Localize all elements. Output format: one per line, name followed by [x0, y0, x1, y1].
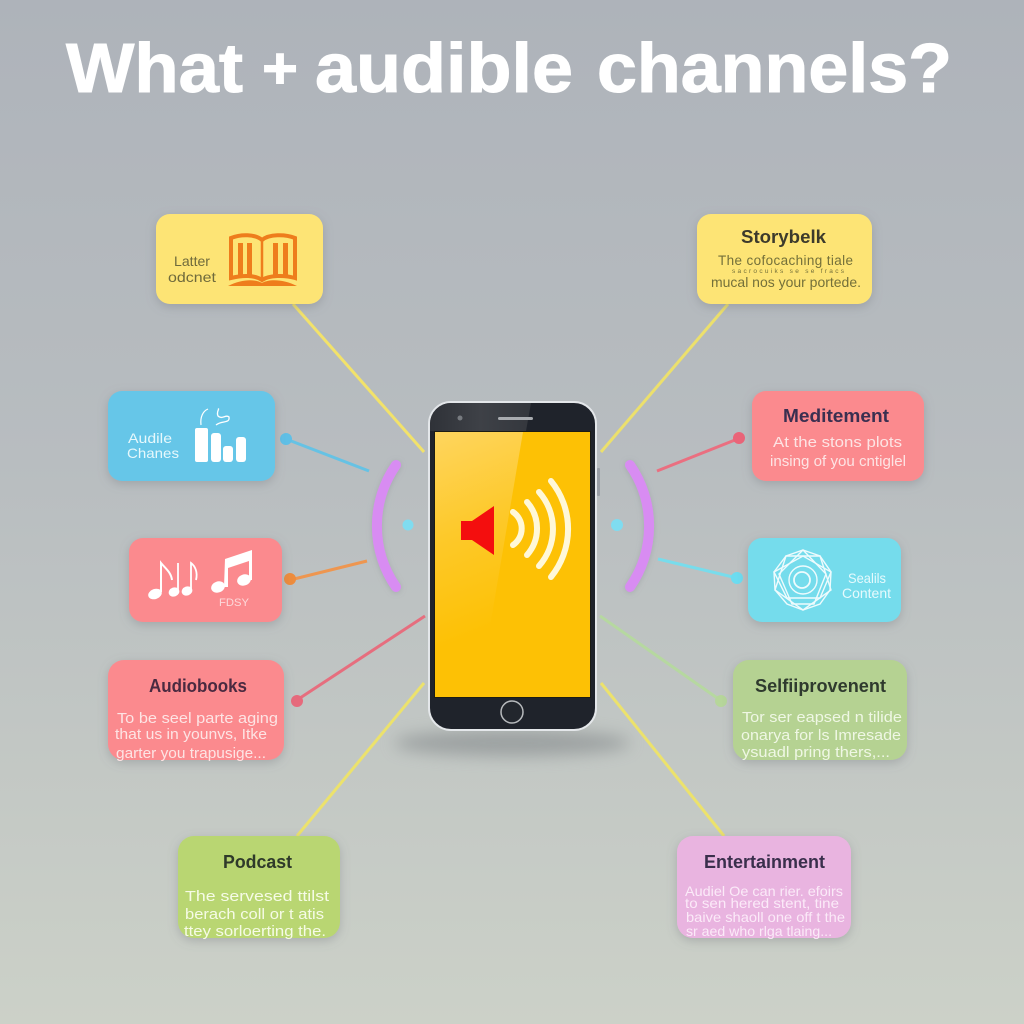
text: meditement body: insing of you cntiglel: [770, 453, 906, 470]
heading: meditement: Meditement: [783, 406, 889, 426]
icon: three small notes: [147, 563, 197, 601]
title: What: [66, 29, 243, 107]
title: [66, 29, 952, 107]
text: self improvement body: ysuadl pring thers,...: [742, 744, 890, 761]
connector: music card to phone: [284, 561, 367, 585]
connector: entertainment card to phone: [601, 683, 724, 836]
phone shadow: [394, 730, 630, 756]
title: +: [262, 36, 298, 101]
text: entertainment body: to sen hered stent, tine: [685, 895, 839, 911]
screen reflection: [435, 432, 523, 697]
text: storybelk body: mucal nos your portede.: [711, 274, 861, 290]
title: channels?: [597, 29, 952, 107]
phone body: [429, 402, 596, 730]
text: storybelk body: sacrocuiks se se fracs: [732, 268, 845, 275]
panel: self improvement card: [733, 660, 907, 761]
icon: red speaker: [461, 506, 494, 555]
label: audible channels text: Chanes: [127, 445, 179, 461]
text: entertainment body: Audiel Oe can rier. efoirs: [685, 883, 843, 899]
panel: audible channels card: [108, 391, 275, 481]
panel: skills content card: [748, 538, 901, 622]
text: audiobooks body: that us in younvs, Itke: [115, 726, 267, 743]
text: meditement body: At the stons plots: [773, 434, 902, 451]
text: meditement body: [770, 434, 906, 470]
text: podcast body: The servesed ttilst: [185, 888, 330, 905]
phone screen: [434, 431, 591, 698]
label: skills content text: [842, 570, 891, 601]
text: self improvement body: Tor ser eapsed n tilide: [742, 709, 902, 726]
label: book card text: [168, 253, 216, 285]
label: audible channels text: [127, 430, 179, 461]
panel: meditement card: [752, 391, 924, 481]
connector: audible channels card to phone: [280, 433, 369, 471]
arc: right sound wave: [630, 465, 649, 587]
label: music card text: FDSY: [219, 597, 250, 609]
heading: self improvement: Selfiiprovenent: [755, 676, 886, 696]
heading: podcast: Podcast: [223, 852, 292, 872]
phone home button: [501, 701, 523, 723]
phone camera: [458, 416, 462, 420]
phone: [429, 402, 600, 730]
connector: meditement card to phone: [657, 432, 745, 471]
dot: left: [402, 520, 414, 530]
connector: skills content card to phone: [658, 559, 743, 584]
text: podcast body: berach coll or t atis: [185, 906, 324, 923]
text: audiobooks body: garter you trapusige...: [116, 745, 266, 762]
phone earpiece: [498, 417, 533, 420]
panel: storybelk card: [697, 214, 872, 304]
dot: right: [611, 519, 623, 531]
panel: podcast card: [178, 836, 340, 940]
connector: podcast card to phone: [297, 683, 424, 836]
phone side button: [597, 468, 600, 496]
panel: music card: [129, 538, 282, 622]
label: audible channels text: Audile: [128, 430, 172, 446]
icon: open book: [228, 235, 297, 286]
text: storybelk body: The cofocaching tiale: [718, 253, 853, 268]
heading: audiobooks: Audiobooks: [149, 676, 247, 696]
heading: storybelk: Storybelk: [741, 227, 827, 247]
arc: left sound wave: [377, 465, 396, 587]
label: book card text: odcnet: [168, 269, 216, 285]
icon: geometric mandala: [774, 550, 831, 610]
text: audiobooks body: [115, 710, 278, 762]
text: entertainment body: sr aed who rlga tlaing...: [686, 923, 832, 939]
heading: entertainment: Entertainment: [704, 852, 825, 872]
icon: beamed notes: [210, 550, 252, 595]
label: skills content text: Sealils: [848, 570, 886, 586]
panel: audiobooks card: [108, 660, 284, 762]
text: entertainment body: [685, 883, 845, 939]
icon: sound waves: [513, 481, 568, 577]
panel: entertainment card: [677, 836, 851, 939]
connector: storybelk card to phone: [601, 304, 728, 452]
phone top highlight: [430, 403, 531, 431]
label: skills content text: Content: [842, 585, 891, 601]
text: audiobooks body: To be seel parte aging: [117, 710, 278, 727]
connector: audiobooks card to phone: [291, 616, 425, 707]
text: entertainment body: baive shaoll one off t the: [686, 909, 845, 925]
label: book card text: Latter: [174, 253, 210, 269]
text: storybelk body: [711, 253, 861, 290]
text: podcast body: [184, 888, 330, 940]
text: self improvement body: [741, 709, 902, 761]
icon: bars with notes: [195, 409, 246, 462]
text: podcast body: ttey sorloerting the.: [184, 923, 326, 940]
connector: book card to phone: [293, 304, 424, 452]
text: self improvement body: onarya for ls Imresade: [741, 727, 901, 744]
title: audible: [315, 29, 573, 107]
connector: self improvement card to phone: [600, 616, 727, 707]
panel: book card: [156, 214, 323, 304]
